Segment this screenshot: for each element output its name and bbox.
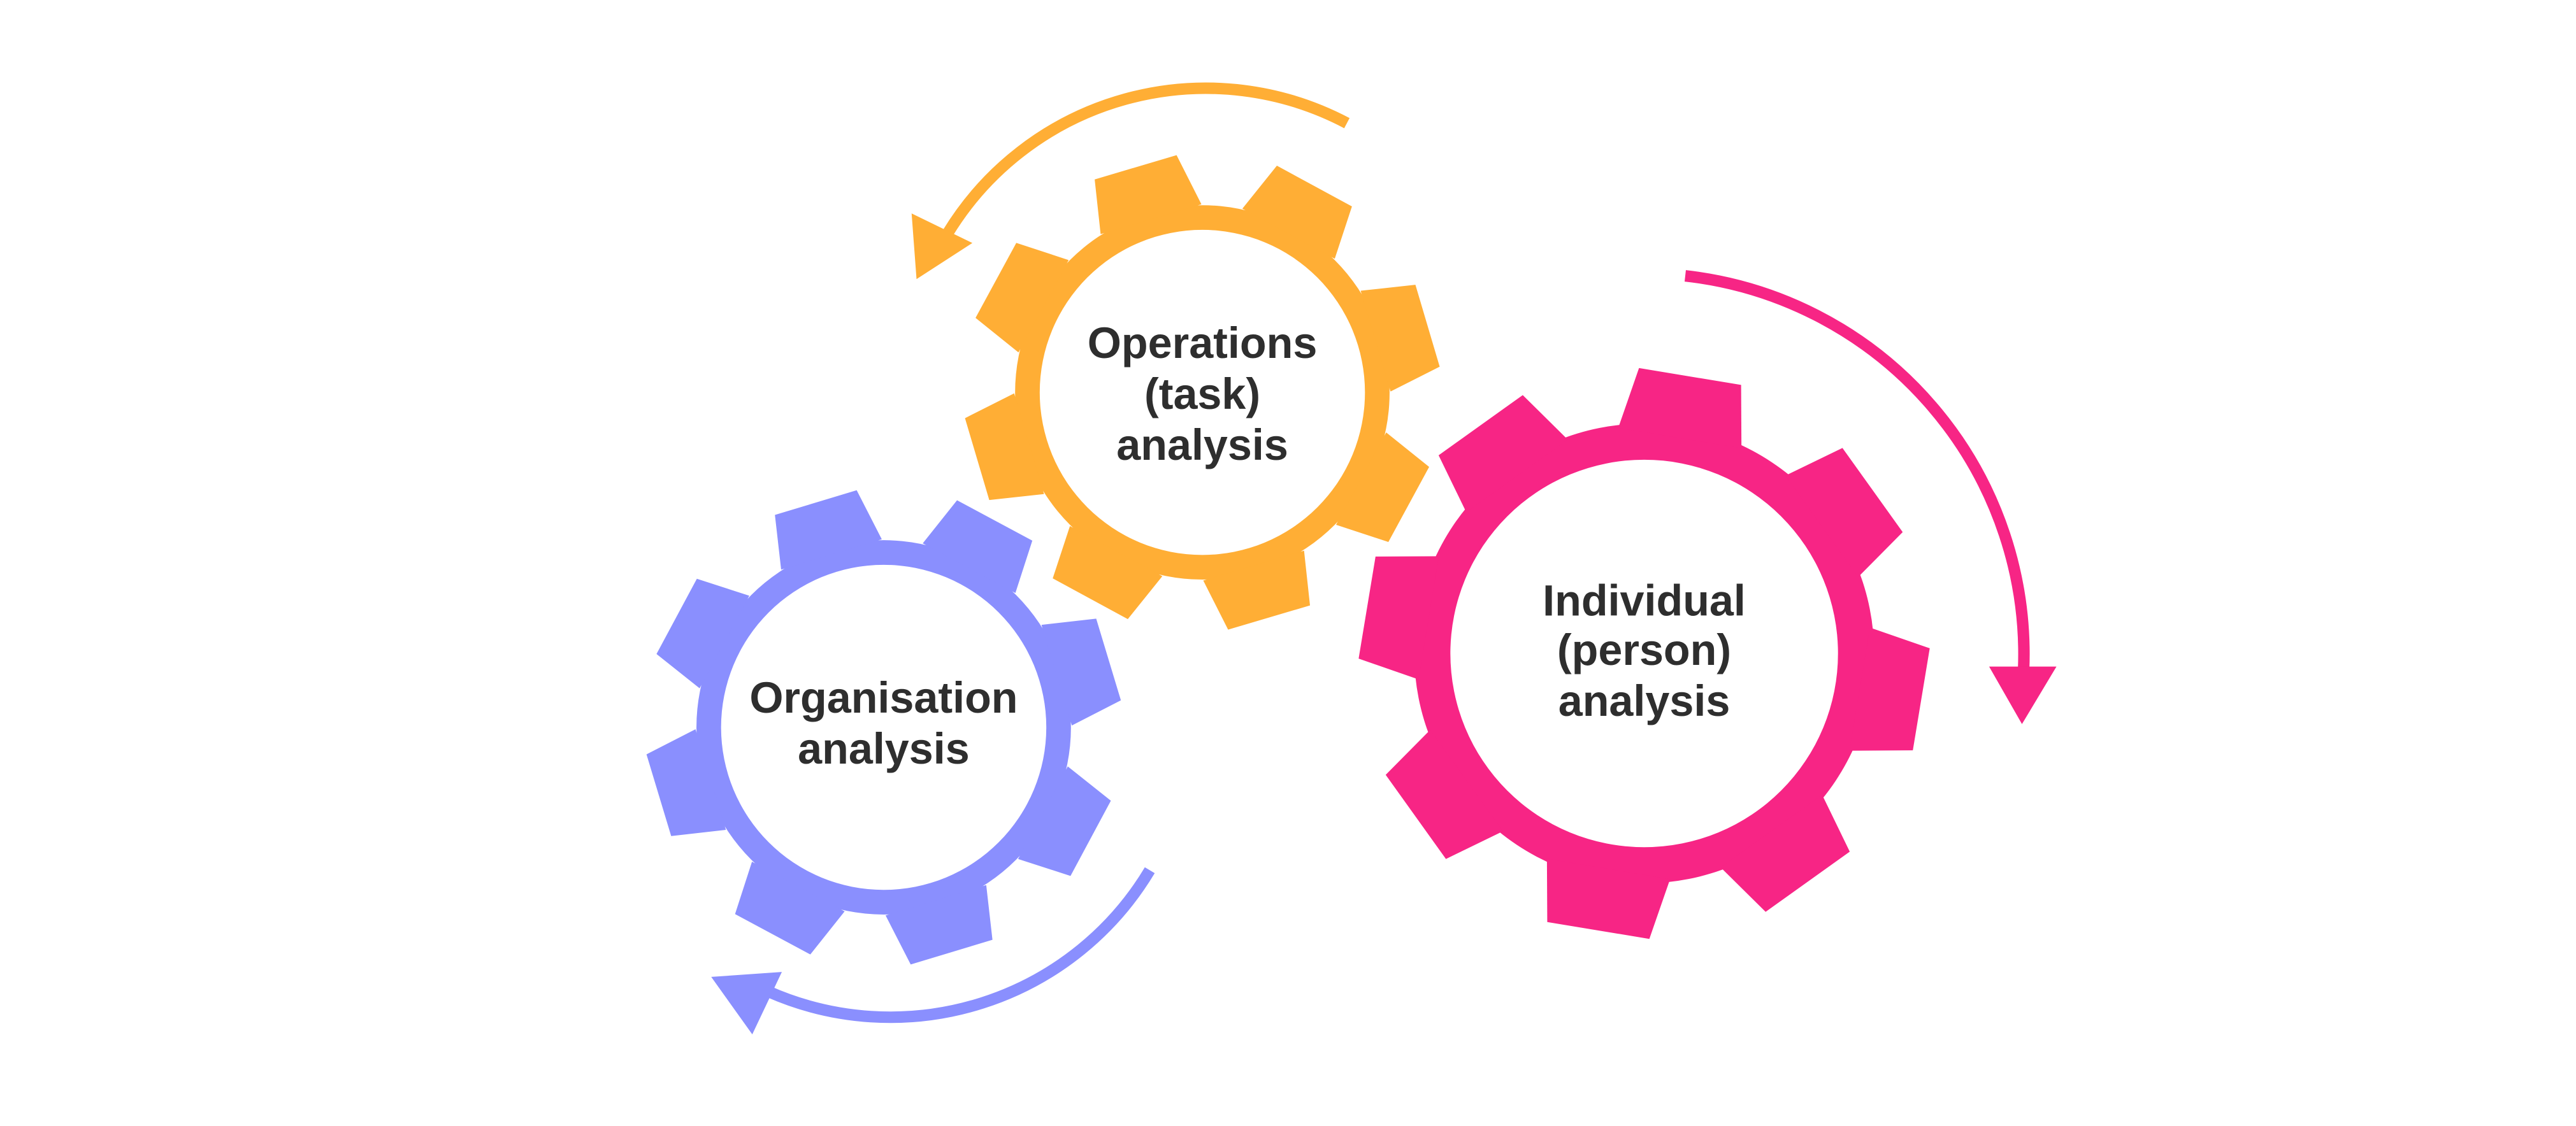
label: individual [1543,577,1746,725]
arrow: blue arc [711,870,1150,1034]
label: organisation: analysis [798,725,970,773]
gear: operations (orange) [962,152,1443,632]
label: individual: (person) [1557,626,1731,674]
label: operations: (task) [1144,370,1260,418]
gear: individual (pink) [1357,366,1931,941]
arrow: orange arc [912,89,1347,279]
label: operations: Operations [1088,319,1317,367]
label: operations: analysis [1116,421,1288,469]
label: individual: analysis [1558,677,1730,725]
label: operations [1088,319,1317,469]
label: organisation [749,674,1018,773]
label: organisation: Organisation [749,674,1018,722]
gear: organisation (blue) [644,487,1124,967]
label: individual: Individual [1543,577,1746,625]
arrow: pink arc [1685,276,2057,724]
